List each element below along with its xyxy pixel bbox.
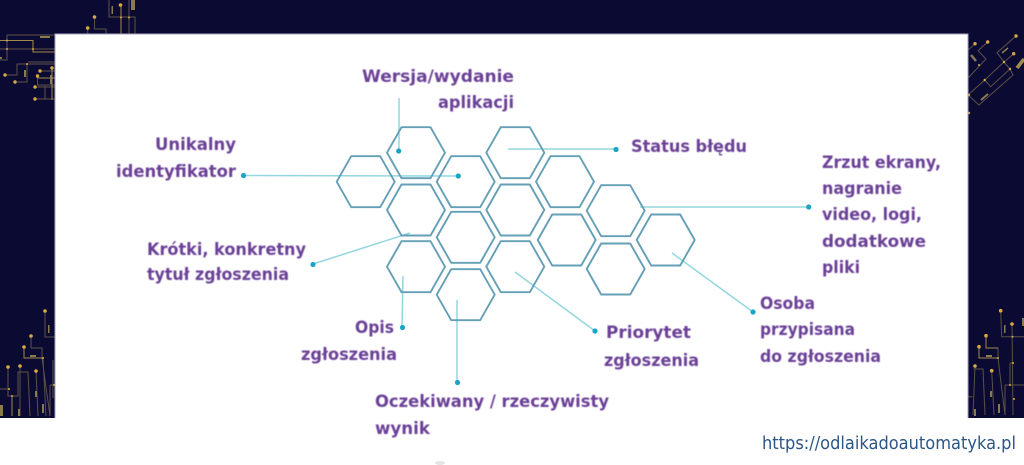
label: attachments: video, logi,: [822, 205, 922, 224]
label: short title: tytuł zgłoszenia: [147, 265, 289, 284]
label: version: [362, 67, 514, 112]
circuit decoration: bottom right: [968, 309, 1024, 416]
label: unique id: [116, 135, 237, 181]
circuit decoration: top centre-left: [86, 0, 135, 34]
label: attachments: Zrzut ekrany,: [822, 153, 941, 172]
connector lines: [243, 98, 808, 382]
label: priority: Priorytet: [606, 323, 691, 342]
label: attachments: dodatkowe: [822, 232, 926, 251]
label: description: zgłoszenia: [301, 345, 397, 364]
label: version: Wersja/wydanie: [362, 67, 514, 86]
connector end dots: [241, 147, 811, 385]
label: priority: zgłoszenia: [604, 351, 699, 370]
hexagon honeycomb: [337, 127, 695, 320]
white content panel: [55, 34, 968, 418]
label: expected vs actual result: wynik: [375, 419, 431, 438]
circuit decoration: top left: [0, 35, 55, 101]
panel edge lines: [55, 34, 968, 418]
label: description: [301, 318, 397, 364]
circuit decoration: bottom left: [0, 309, 55, 416]
label: priority: [604, 323, 699, 370]
label: version: aplikacji: [438, 93, 514, 112]
label: assignee: przypisana: [760, 320, 855, 339]
label: assignee: do zgłoszenia: [760, 347, 881, 366]
label: expected vs actual result: Oczekiwany / rzeczywisty: [375, 392, 609, 411]
label: attachments: [822, 153, 941, 277]
label: unique id: identyfikator: [116, 162, 237, 181]
label: expected vs actual result: [375, 392, 609, 438]
label: attachments: pliki: [822, 258, 860, 277]
label: status: Status błędu: [631, 137, 747, 156]
label: assignee: Osoba: [760, 294, 815, 313]
label: description: Opis: [355, 318, 394, 337]
circuit decoration: top right: [968, 34, 1024, 114]
label: unique id: Unikalny: [155, 135, 236, 154]
faint mark below panel: [435, 461, 445, 465]
label: attachments: nagranie: [822, 179, 902, 198]
label: short title: Krótki, konkretny: [147, 240, 306, 259]
label: short title: [147, 240, 306, 284]
label: assignee: [760, 294, 881, 366]
